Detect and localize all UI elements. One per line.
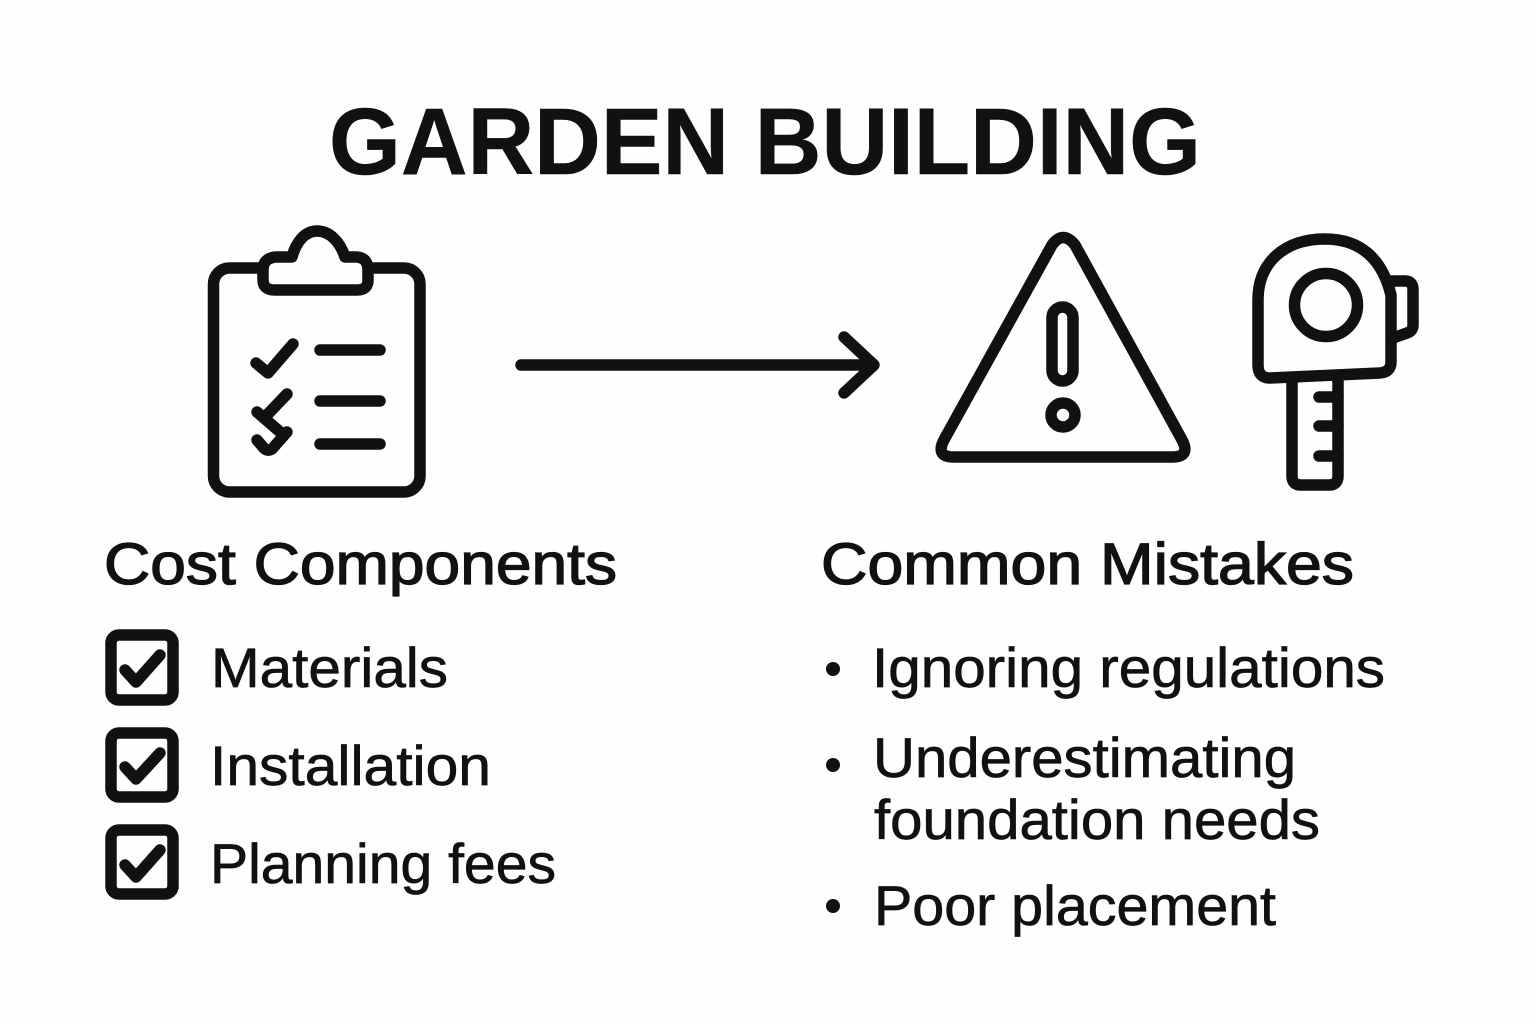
title: GARDEN BUILDING (329, 89, 1201, 195)
icon: tape measure (1258, 239, 1413, 485)
panel: common mistakes (821, 532, 1385, 937)
icon: clipboard checklist (214, 231, 420, 492)
panel: cost components (104, 532, 617, 895)
icon: warning triangle (941, 238, 1185, 457)
list item: underestimating foundation needs: foundation needs (874, 788, 1320, 851)
list item: planning fees: Planning fees (210, 832, 556, 895)
list item: underestimating foundation needs (826, 726, 1320, 851)
list item: poor placement: Poor placement (874, 874, 1276, 937)
list item: installation: Installation (210, 734, 491, 797)
list item: installation (111, 733, 491, 797)
list item: ignoring regulations: Ignoring regulations (872, 636, 1385, 699)
list item: materials: Materials (211, 636, 448, 699)
heading: common mistakes: Common Mistakes (821, 532, 1354, 597)
arrow (521, 337, 874, 393)
list item: materials (111, 635, 448, 700)
list item: underestimating foundation needs: Underestimating (873, 726, 1296, 789)
heading: cost components: Cost Components (104, 532, 617, 597)
